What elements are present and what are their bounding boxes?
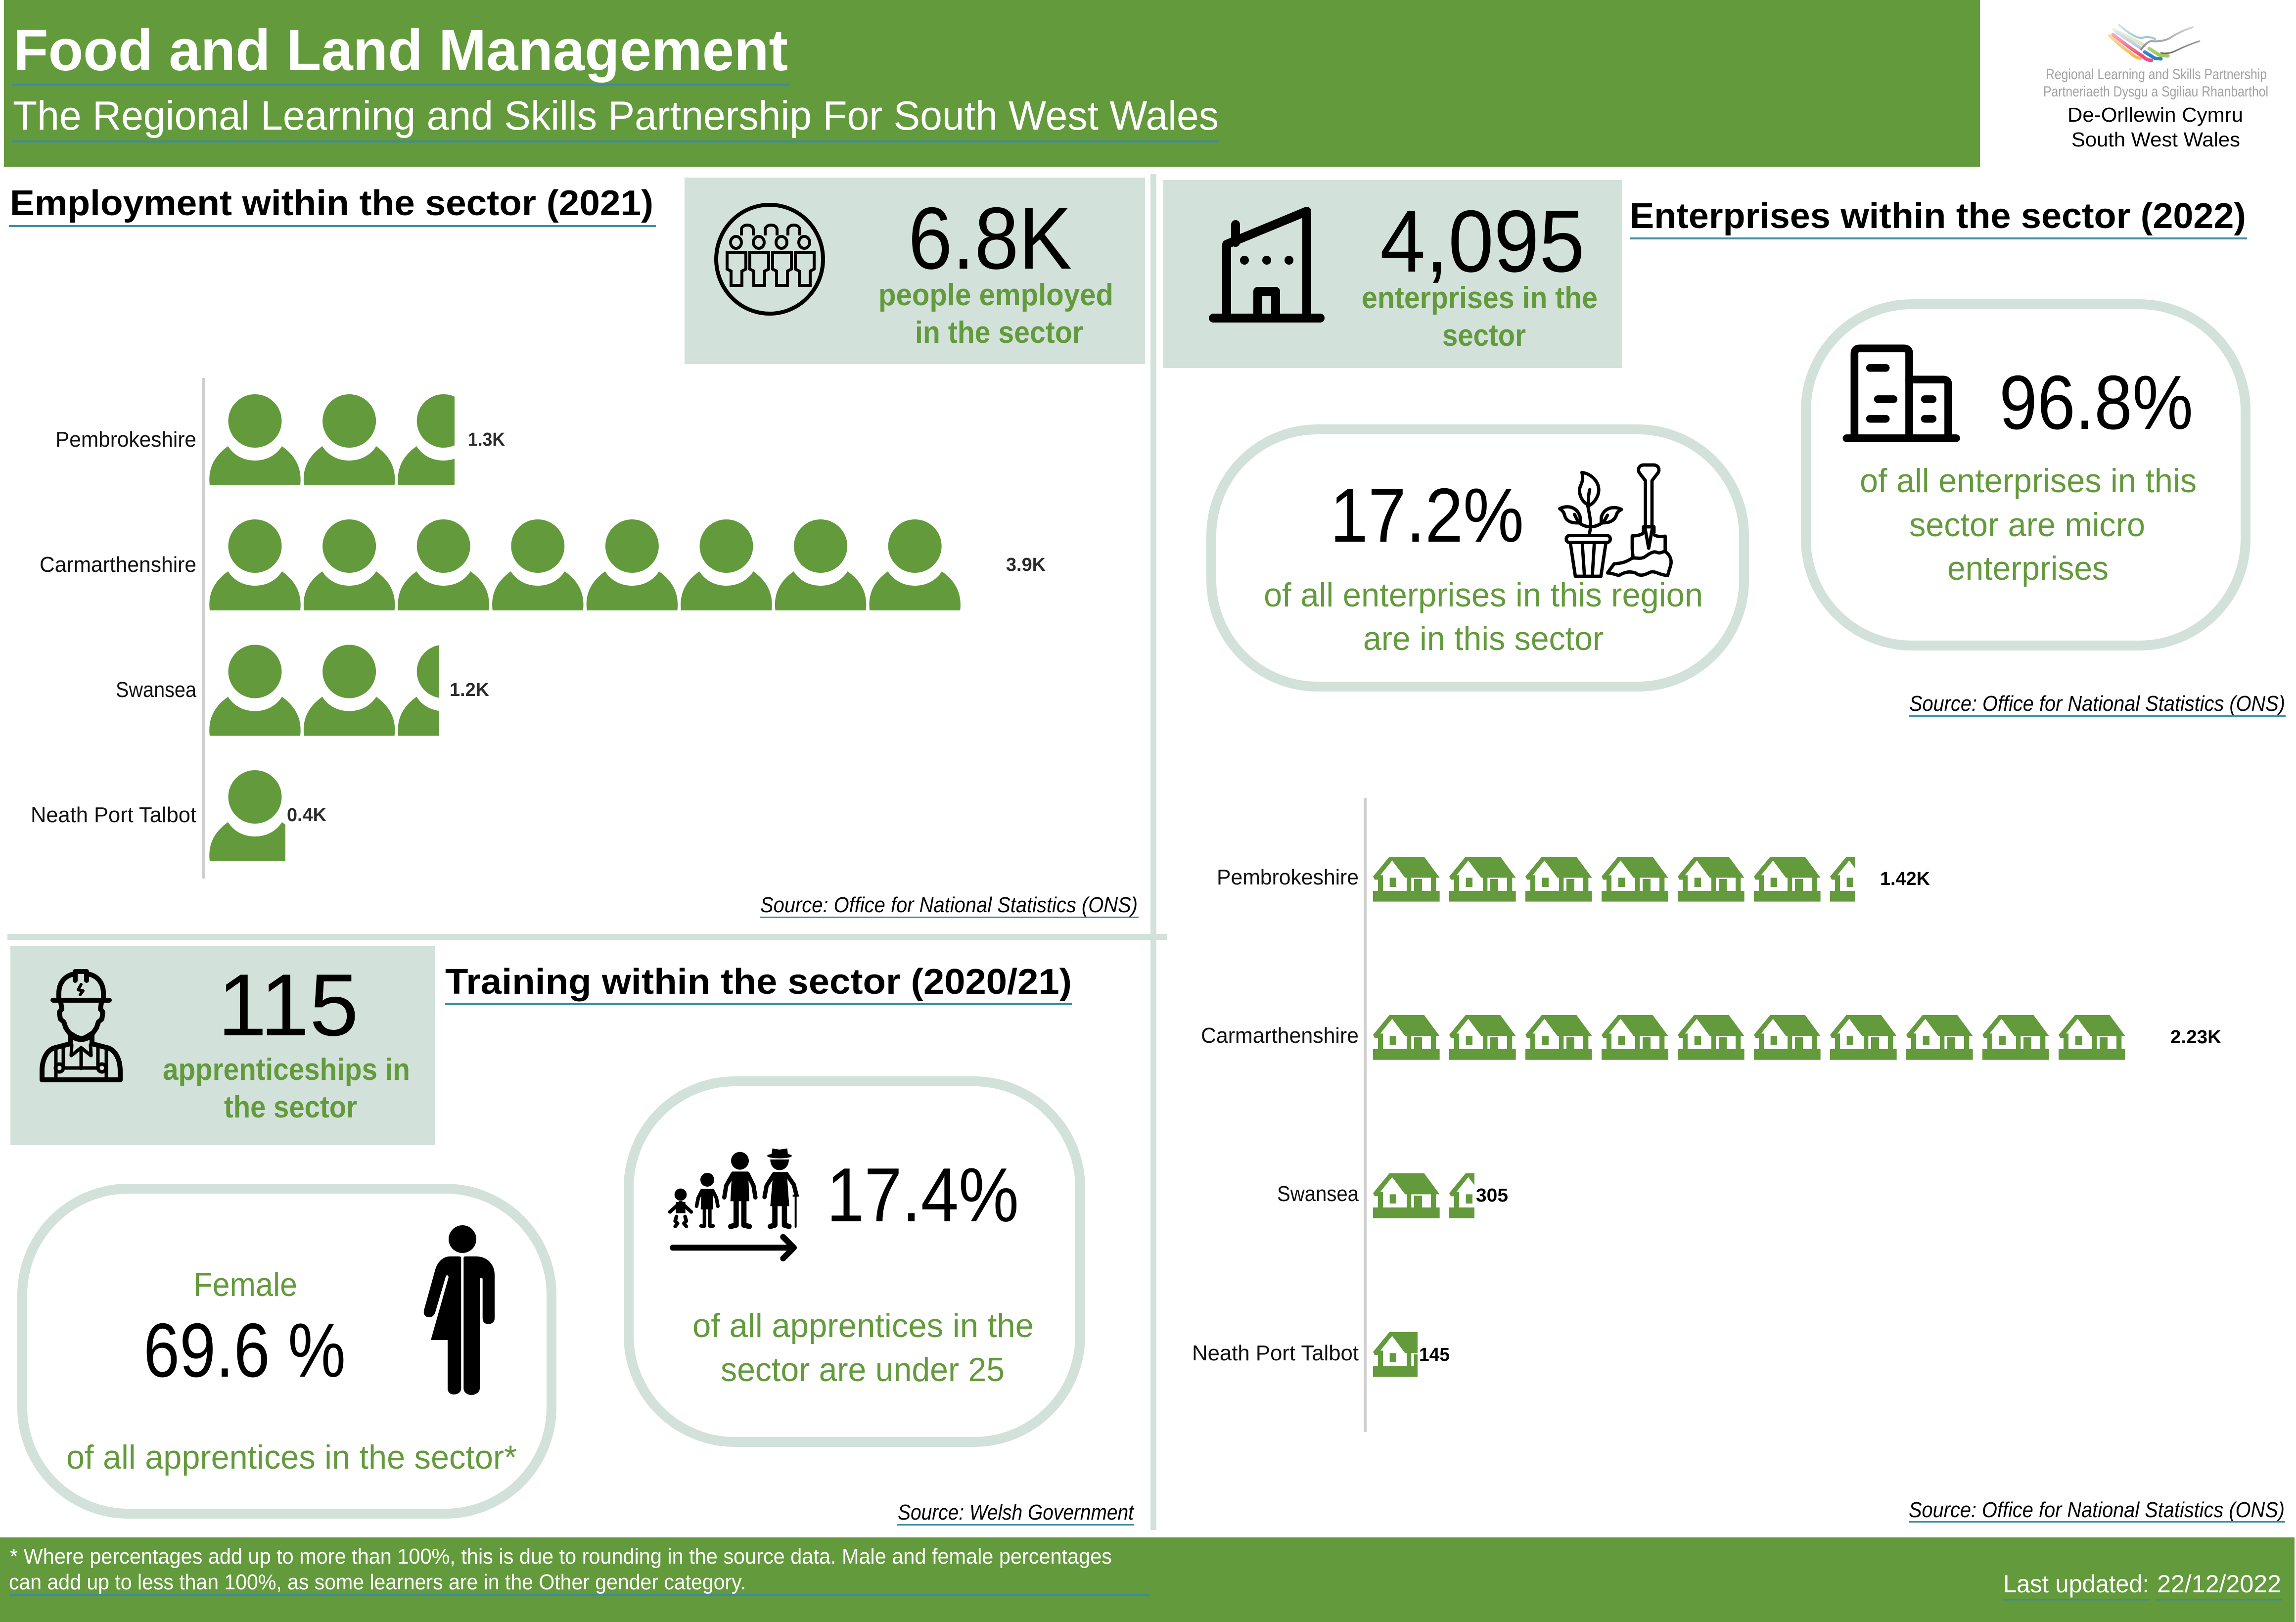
row: Swansea: 1.2K: [450, 680, 490, 700]
row: Carmarthenshire: Carmarthenshire: [40, 553, 196, 577]
logo: Regional Learning and Skills Partnership: De-Orllewin Cymru: [2067, 103, 2243, 126]
source: employment: Source: Office for National Statistics (ONS): [760, 893, 1138, 917]
stat caption: people employed: [878, 278, 1113, 312]
stat value: 96.8%: [1999, 360, 2193, 445]
logo: Regional Learning and Skills Partnership: South West Wales: [2071, 128, 2240, 151]
row: Pembrokeshire: [1217, 857, 1930, 902]
callout caption: of all apprentices in the sector*: [66, 1438, 517, 1476]
row: Carmarthenshire: Carmarthenshire: [1201, 1023, 1359, 1048]
logo ribbons: [2110, 25, 2200, 60]
row: Pembrokeshire: 1.42K: [1880, 869, 1930, 889]
footnote: can add up to less than 100%, as some learners are in the Other gender category.: [9, 1570, 746, 1594]
stat value: 17.2%: [1330, 472, 1524, 558]
pictogram chart: employment by area: [31, 378, 1046, 879]
callout caption: enterprises: [1947, 550, 2109, 587]
callout caption: [692, 1307, 1034, 1389]
row: Carmarthenshire: [40, 519, 1046, 610]
row: Pembrokeshire: [55, 394, 505, 485]
stat caption: sector: [1442, 319, 1526, 353]
stat caption: [1362, 281, 1598, 353]
source: training: Source: Welsh Government: [898, 1500, 1135, 1525]
icon: gender figure: [424, 1225, 495, 1395]
stat caption: enterprises in the: [1362, 281, 1598, 315]
stat caption: [878, 278, 1113, 350]
icon: plant and shovel: [1560, 465, 1671, 576]
row: Swansea: Swansea: [116, 678, 196, 702]
stat value: 69.6 %: [143, 1307, 346, 1393]
stat value: 4,095: [1380, 192, 1585, 290]
callout: apprentices under 25: [629, 1081, 1080, 1442]
stat value: 115: [218, 956, 359, 1054]
row: Carmarthenshire: 3.9K: [1006, 555, 1046, 575]
row: Swansea: [1277, 1173, 1516, 1218]
row: Neath Port Talbot: [31, 770, 327, 861]
row: Carmarthenshire: 2.23K: [2170, 1027, 2222, 1048]
row: Swansea: Swansea: [1277, 1182, 1359, 1206]
subtitle: The Regional Learning and Skills Partnership For South West Wales: [13, 93, 1219, 139]
callout caption: of all apprentices in the: [692, 1307, 1034, 1344]
stat card: people employed: [685, 178, 1145, 364]
callout caption: of all enterprises in this region: [1264, 576, 1703, 614]
row: Neath Port Talbot: Neath Port Talbot: [1192, 1341, 1359, 1365]
row: Neath Port Talbot: Neath Port Talbot: [31, 803, 196, 827]
stat value: 6.8K: [908, 189, 1072, 287]
last updated: Last updated:: [2003, 1570, 2149, 1598]
icon: factory building: [1213, 211, 1320, 318]
callout caption: sector are under 25: [721, 1351, 1005, 1389]
stat card: apprenticeships: [10, 946, 435, 1145]
row: Carmarthenshire: [1201, 1015, 2222, 1060]
row: Swansea: [116, 645, 490, 736]
pictogram chart: enterprises by area: [1192, 798, 2222, 1432]
heading: training: Training within the sector (2020/21): [445, 962, 1072, 1002]
icon: group of people in circle: [716, 205, 823, 314]
callout: share of enterprises in region: [1211, 429, 1744, 687]
row: Pembrokeshire: Pembrokeshire: [1217, 865, 1359, 889]
stat caption: apprenticeships in: [163, 1053, 410, 1087]
stat card: enterprises: [1163, 180, 1622, 368]
panel dividers: [7, 174, 1167, 1530]
title: Food and Land Management: [13, 18, 788, 83]
last updated: 22/12/2022: [2157, 1570, 2281, 1598]
stat caption: the sector: [224, 1090, 357, 1124]
heading: employment: Employment within the sector (2021): [10, 184, 653, 223]
callout caption: [1860, 462, 2197, 587]
row: Neath Port Talbot: 145: [1419, 1344, 1450, 1365]
callout: female apprentices: [22, 1189, 551, 1514]
row: Pembrokeshire: Pembrokeshire: [55, 427, 196, 452]
row: Neath Port Talbot: 0.4K: [287, 805, 327, 826]
stat caption: [163, 1053, 410, 1124]
stat caption: in the sector: [915, 316, 1083, 350]
footnote: * Where percentages add up to more than 100%, this is due to rounding in the source data. Male and female percentages: [10, 1544, 1112, 1569]
last updated: [2003, 1570, 2282, 1601]
icon: ages with arrow: [670, 1149, 799, 1258]
heading: enterprises: Enterprises within the sector (2022): [1630, 196, 2246, 236]
callout caption: are in this sector: [1363, 620, 1604, 657]
stat value: 17.4%: [827, 1152, 1019, 1238]
icon: office buildings: [1846, 348, 1956, 438]
label: Female: Female: [193, 1266, 297, 1303]
callout caption: of all enterprises in this: [1860, 462, 2197, 500]
callout caption: [1264, 576, 1703, 657]
footer banner: [0, 1537, 2295, 1622]
callout: micro enterprises: [1806, 304, 2246, 646]
row: Swansea: 305: [1476, 1185, 1508, 1206]
icon: construction worker: [42, 972, 120, 1080]
row: Neath Port Talbot: [1192, 1332, 1450, 1377]
header banner: [4, 0, 1980, 167]
footnote: [9, 1544, 1149, 1596]
row: Pembrokeshire: 1.3K: [468, 429, 505, 450]
callout caption: sector are micro: [1909, 506, 2145, 544]
logo: Regional Learning and Skills Partnership: [2043, 25, 2268, 151]
